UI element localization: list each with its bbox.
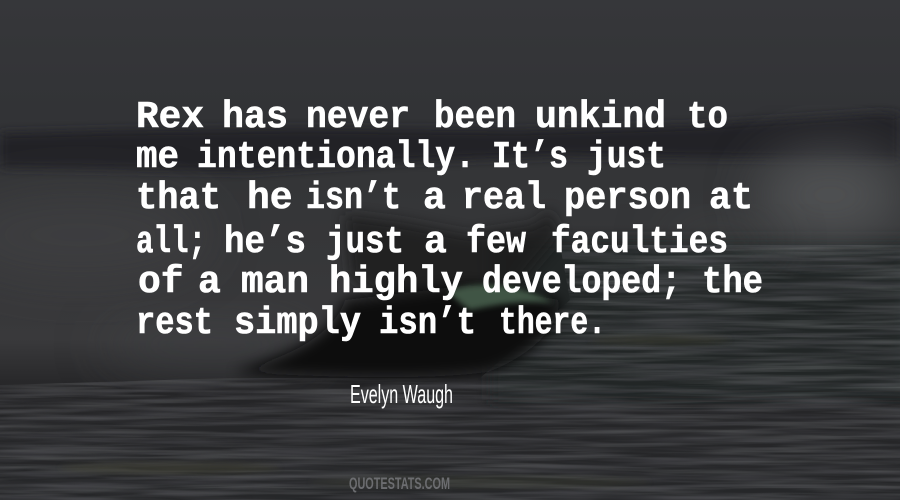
line 3: that [136,177,221,220]
line 5: the [702,261,763,304]
line 4 [136,221,728,264]
shoreline [0,113,900,172]
line 4: faculties [551,221,728,264]
line 6 [136,302,606,345]
line 5: man [241,261,309,304]
line 1 [136,96,728,139]
dark right water [490,240,900,400]
line 4: few [466,221,526,264]
line 3: real [462,177,546,220]
line 6: simply [234,302,361,345]
line 3: person [564,177,691,220]
line 1: been [434,96,516,139]
line 4: he’s [224,221,306,264]
line 6: rest [136,302,213,345]
rider [345,210,560,300]
line 2: intentionally. [197,136,475,179]
line 5 [138,261,763,304]
line 3: he [247,177,293,220]
line 1: to [687,96,728,139]
line 1: Rex [136,96,204,139]
line 1: has [222,96,288,139]
line 5: of [138,261,184,304]
line 6: isn’t [379,302,476,345]
line 1: unkind [535,96,666,139]
green panel [448,285,553,310]
watermark: QUOTESTATS.COM [349,474,450,493]
water streaks [0,240,900,500]
line 4: a [424,221,447,264]
line 2: just [587,136,666,179]
spray right [755,150,900,240]
line 5: highly [329,261,463,304]
line 5: developed; [482,261,681,304]
line 1: never [306,96,410,139]
line 2: me [136,136,179,179]
line 4: just [326,221,404,264]
line 3: isn’t [306,177,401,220]
line 2: It’s [492,136,568,179]
hull [232,285,560,377]
line 4: all; [136,221,206,264]
line 6: there. [499,302,606,345]
author name: Evelyn Waugh [350,379,453,409]
line 3: at [709,177,753,220]
line 2 [136,136,666,179]
spray left [0,190,210,280]
line 3 [136,177,753,220]
line 3: a [423,177,446,220]
line 5: a [198,261,221,304]
